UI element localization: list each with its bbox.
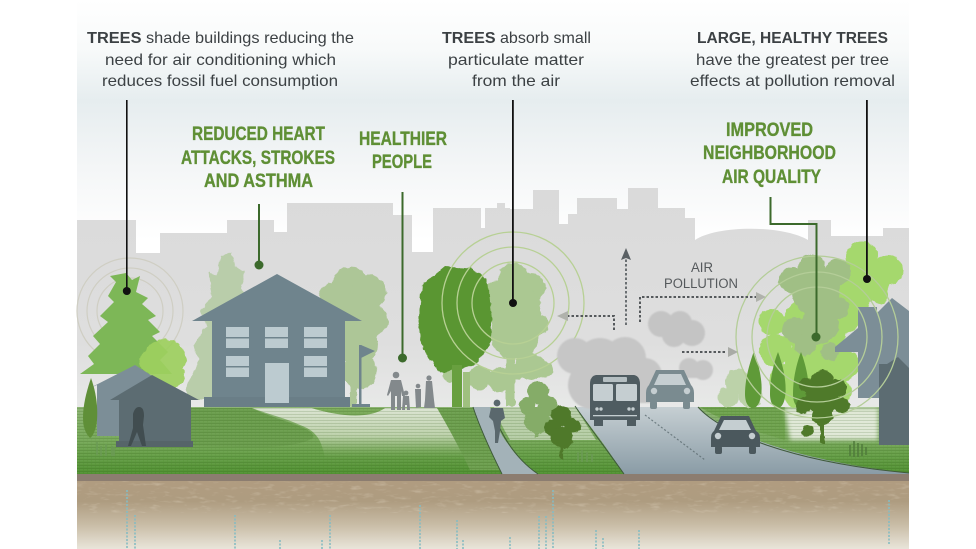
icon: runner: [489, 400, 505, 443]
leader line: reduced heart attacks: [254, 204, 264, 270]
leader line: healthier people: [398, 192, 407, 362]
air pollution rings: left: [77, 258, 183, 364]
footpath edge lines: [473, 407, 538, 474]
text block: trees shade buildings: TREES shade buildings reducing the: [87, 30, 354, 47]
tree: mid green behind: [779, 254, 851, 361]
smoke cloud: large: [557, 337, 662, 409]
plants: [578, 450, 592, 462]
road: [575, 407, 909, 474]
footpath: [473, 407, 538, 474]
house: rear small: [90, 365, 168, 436]
plants: [97, 442, 114, 456]
tree: pale broadleaf right of house: [319, 267, 388, 406]
label: air pollution: [664, 260, 738, 291]
tree: small dark green: [544, 406, 580, 459]
heading: improved air quality: NEIGHBORHOOD: [703, 143, 836, 164]
heading: reduced heart attacks: [181, 124, 335, 192]
tree: top right bright: [830, 241, 903, 320]
heading: healthier people: [359, 129, 447, 173]
house: front small: [110, 375, 199, 447]
tree: bright conifer left: [80, 273, 172, 374]
panel: grass ground: [77, 407, 909, 474]
leader line: neighborhood air quality: [770, 197, 820, 342]
text block: large healthy trees: LARGE, HEALTHY TREES: [697, 30, 888, 47]
smoke cloud: lower: [679, 358, 713, 380]
arrow: pollution left: [557, 311, 614, 330]
leader line: trees shade buildings: [123, 100, 131, 295]
tree: pale conifer behind house: [186, 252, 252, 400]
label: air pollution: AIR: [691, 260, 713, 275]
house: right rear: [835, 298, 909, 398]
road centre dashes: [645, 415, 705, 460]
text block: trees absorb: [442, 30, 591, 90]
tree: light green round: [140, 339, 186, 389]
arrow: pollution up: [621, 248, 631, 325]
sky background: [77, 0, 909, 240]
arrow: pollution lower right: [682, 347, 738, 357]
text block: trees shade buildings: need for air conditioning which: [105, 52, 336, 69]
text block: trees absorb: from the air: [472, 73, 561, 90]
label: air pollution: POLLUTION: [664, 276, 738, 291]
text block: trees absorb: particulate matter: [448, 52, 585, 69]
heading: improved air quality: IMPROVED: [726, 120, 813, 141]
tree: cypress left: [83, 378, 97, 438]
heading: reduced heart attacks: REDUCED HEART: [192, 124, 325, 145]
tree: large green: [418, 266, 492, 373]
tree: dark green right: [795, 370, 850, 443]
air pollution rings: middle: [442, 232, 584, 374]
icon: car front: [711, 416, 760, 454]
tree trunks: [452, 365, 462, 407]
text block: large healthy trees: have the greatest per tree: [696, 52, 889, 69]
text block: trees shade buildings: [87, 30, 354, 90]
icon: flag: [352, 345, 375, 407]
air pollution rings: right: [736, 256, 898, 418]
text block: large healthy trees: [690, 30, 895, 90]
heading: healthier people: HEALTHIER: [359, 129, 447, 150]
heading: healthier people: PEOPLE: [372, 152, 432, 173]
panel: soil and groundwater: [77, 474, 909, 549]
house: right front: [879, 357, 909, 445]
leader line: trees absorb: [509, 100, 517, 307]
road edge lines: [575, 406, 909, 474]
heading: improved air quality: AIR QUALITY: [722, 167, 821, 188]
pale trunk: [463, 372, 470, 407]
tree: bright green large: [759, 293, 860, 408]
house: main: [192, 274, 362, 407]
city skyline: [77, 188, 909, 408]
text block: large healthy trees: effects at pollution removal: [690, 73, 895, 90]
leader line: large healthy trees: [863, 100, 871, 283]
tree: pale far right cluster: [718, 369, 762, 408]
heading: improved air quality: [703, 120, 836, 188]
heading: reduced heart attacks: ATTACKS, STROKES: [181, 148, 335, 169]
icon: car back: [646, 370, 694, 409]
heading: reduced heart attacks: AND ASTHMA: [204, 171, 313, 192]
tree: pale behind big tree: [443, 263, 553, 406]
icon: bus: [590, 375, 640, 426]
tree: small pale green: [519, 381, 558, 438]
trees: cypress row: [745, 351, 809, 408]
text block: trees shade buildings: reduces fossil fuel consumption: [102, 73, 338, 90]
smoke cloud: upper: [648, 311, 705, 347]
plants: [850, 441, 866, 457]
icon: person walking: [128, 407, 146, 446]
arrow: pollution upper right: [640, 292, 766, 322]
icon: family: [387, 372, 435, 410]
text block: trees absorb: TREES absorb small: [442, 30, 591, 47]
